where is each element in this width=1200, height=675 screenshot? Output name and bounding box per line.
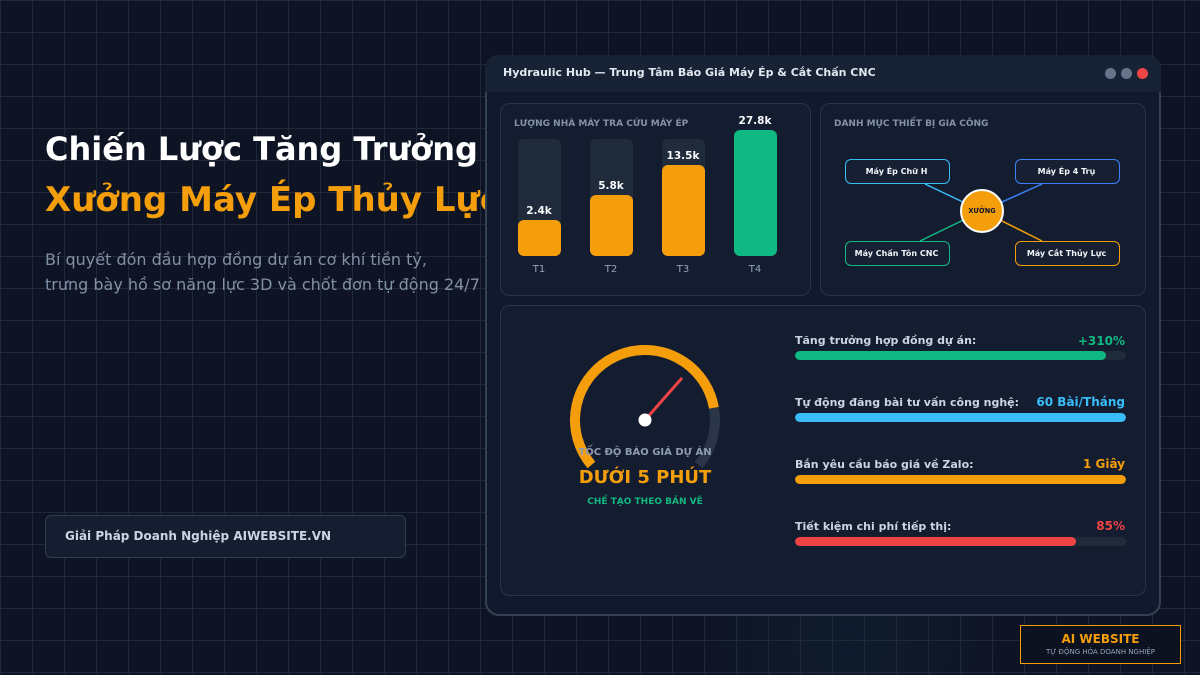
text: 60 Bài/Tháng: [1036, 395, 1125, 409]
node: Máy Cắt Thủy Lực: Máy Cắt Thủy Lực: [1027, 249, 1106, 258]
text: Tăng trưởng hợp đồng dự án:: [795, 334, 976, 347]
bar T3: 13.5k: [667, 150, 699, 162]
brand tagline: TỰ ĐỘNG HÓA DOANH NGHIỆP: [1046, 648, 1155, 656]
node: Máy Ép Chữ H: Máy Ép Chữ H: [866, 167, 927, 176]
dashboard window: [485, 55, 1161, 616]
subtitle: trưng bày hồ sơ năng lực 3D và chốt đơn tự động 24/7: [45, 275, 480, 294]
brand name: AI WEBSITE: [1062, 632, 1140, 646]
bar T1: T1: [533, 264, 545, 275]
title line 1: Chiến Lược Tăng Trưởng: [45, 130, 478, 168]
node: Máy Chấn Tôn CNC: [845, 241, 950, 266]
bar T3: T3: [677, 264, 689, 275]
subtitle: Bí quyết đón đầu hợp đồng dự án cơ khí tiền tỷ,: [45, 250, 427, 269]
text: Tự động đăng bài tư vấn công nghệ:: [795, 396, 1019, 409]
bar T2: T2: [605, 264, 617, 275]
window header: [485, 55, 1161, 92]
panel: performance: [500, 305, 1146, 596]
hub: Xưởng: [960, 189, 1004, 233]
bar T4: [734, 115, 777, 275]
solution badge: Giải Pháp Doanh Nghiệp AIWEBSITE.VN: [65, 529, 331, 543]
gauge label: TỐC ĐỘ BÁO GIÁ DỰ ÁN: [578, 447, 712, 458]
gauge: [570, 345, 720, 468]
bar T2: [590, 139, 633, 275]
node: Máy Ép 4 Trụ: Máy Ép 4 Trụ: [1038, 167, 1095, 176]
gauge caption: CHẾ TẠO THEO BẢN VẼ: [587, 497, 703, 507]
bar T2: 5.8k: [598, 180, 624, 192]
metric: growth: [795, 334, 1126, 360]
node: Máy Cắt Thủy Lực: [1015, 241, 1120, 266]
panel: bar chart: [500, 103, 811, 296]
text: +310%: [1078, 334, 1125, 348]
bar chart: [518, 115, 777, 275]
node: Máy Chấn Tôn CNC: Máy Chấn Tôn CNC: [855, 249, 938, 258]
metric: auto posts: [795, 395, 1126, 422]
text: Tiết kiệm chi phí tiếp thị:: [795, 520, 951, 533]
solution badge: [45, 515, 406, 558]
bar T1: [518, 139, 561, 275]
text: 85%: [1096, 519, 1125, 533]
metric: marketing savings: [795, 519, 1126, 546]
text: 1 Giây: [1083, 457, 1125, 471]
brand badge: [1020, 625, 1181, 664]
window title: Hydraulic Hub — Trung Tâm Báo Giá Máy Ép & Cắt Chấn CNC: [503, 66, 876, 79]
bar T1: 2.4k: [526, 205, 552, 217]
gauge value: DƯỚI 5 PHÚT: [579, 467, 711, 488]
panel: equipment diagram: [820, 103, 1146, 296]
window controls: [1105, 68, 1148, 79]
left column: [45, 130, 485, 558]
bar T3: [662, 139, 705, 275]
connector lines: [920, 184, 1042, 241]
hub: Xưởng: XƯỞNG: [968, 207, 996, 215]
bar T4: 27.8k: [739, 115, 771, 127]
text: Bắn yêu cầu báo giá về Zalo:: [795, 458, 974, 471]
heading: equipment diagram: DANH MỤC THIẾT BỊ GIA CÔNG: [834, 119, 988, 129]
node: Máy Ép Chữ H: [845, 159, 950, 184]
heading: bar chart: LƯỢNG NHÀ MÁY TRA CỨU MÁY ÉP: [514, 119, 688, 129]
metric: Zalo quote: [795, 457, 1126, 484]
subtitle: [45, 250, 480, 294]
bar T4: T4: [749, 264, 761, 275]
node: Máy Ép 4 Trụ: [1015, 159, 1120, 184]
